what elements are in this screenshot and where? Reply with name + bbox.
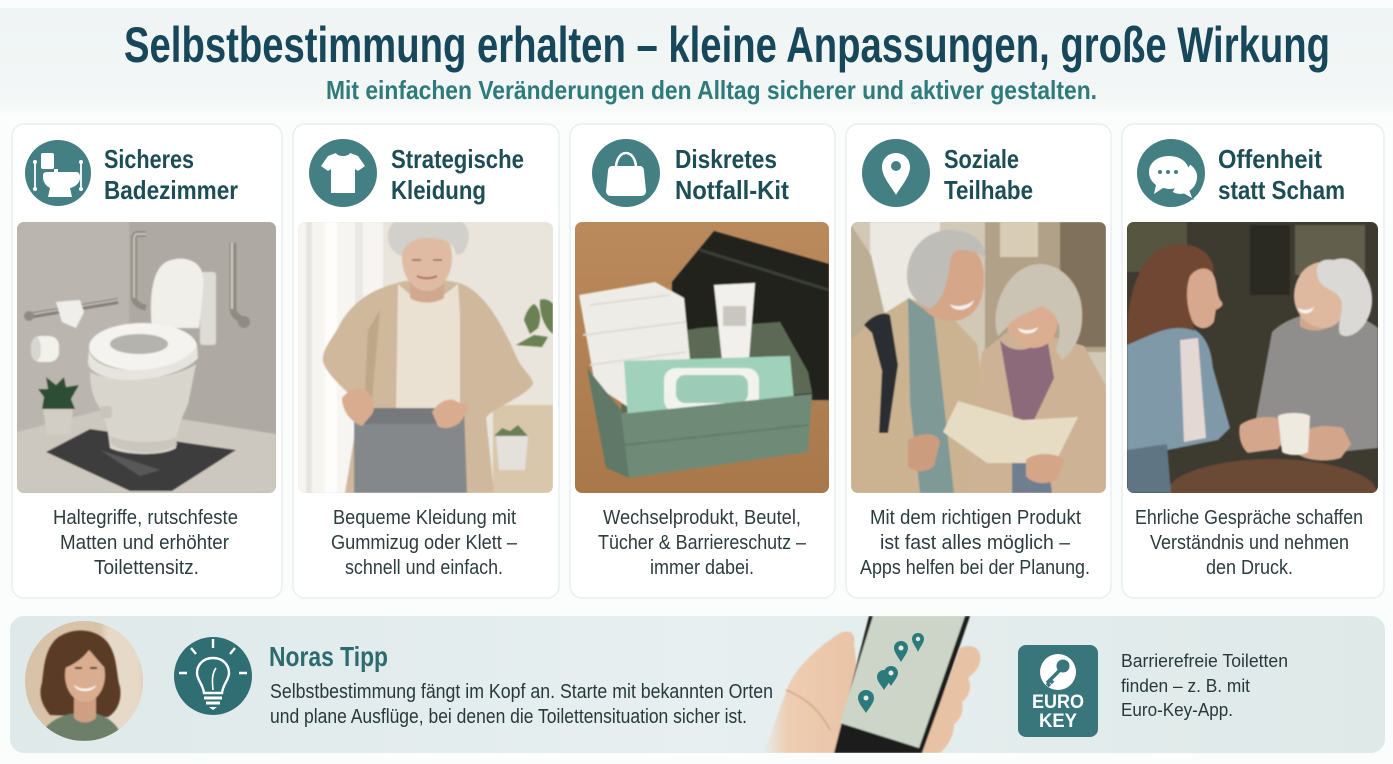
panel: tip banner xyxy=(10,616,1385,753)
illustration: hand with phone map xyxy=(762,616,980,753)
description: Verständnis und nehmen xyxy=(1150,532,1349,554)
description xyxy=(598,507,807,579)
description: ist fast alles möglich – xyxy=(880,532,1071,554)
badge: Euro Key xyxy=(1018,645,1098,737)
photo: accessible toilet xyxy=(17,222,276,493)
icon: bag xyxy=(592,139,660,207)
heading xyxy=(1218,144,1345,205)
heading: Sicheres xyxy=(104,144,194,174)
icon: toilet xyxy=(25,140,91,206)
badge: Euro Key: EURO xyxy=(1032,692,1084,713)
avatar: Nora xyxy=(25,621,143,741)
heading: Kleidung xyxy=(391,175,486,205)
description xyxy=(53,507,238,579)
panel: Diskretes Notfall-Kit xyxy=(570,124,835,598)
description: Tücher & Barriereschutz – xyxy=(598,532,807,554)
description xyxy=(1135,507,1363,579)
subtitle: Mit einfachen Veränderungen den Alltag sicherer und aktiver gestalten. xyxy=(326,75,1097,105)
icon: map pin xyxy=(862,139,930,207)
heading xyxy=(944,144,1033,205)
description: Gummizug oder Klett – xyxy=(331,532,518,554)
Euro Key text: Euro-Key-App. xyxy=(1121,700,1233,720)
description: Ehrliche Gespräche schaffen xyxy=(1135,507,1363,529)
Euro Key text xyxy=(1121,651,1288,720)
icon: t-shirt xyxy=(309,139,377,207)
heading: Soziale xyxy=(944,144,1019,174)
tip text: Selbstbestimmung fängt im Kopf an. Starte mit bekannten Orten xyxy=(270,681,773,703)
photo: two women at cafe xyxy=(1127,222,1378,493)
icon: speech bubbles xyxy=(1137,139,1205,207)
description: Haltegriffe, rutschfeste xyxy=(53,507,238,529)
tip text: und plane Ausflüge, bei denen die Toilettensituation sicher ist. xyxy=(270,706,747,728)
heading xyxy=(675,144,789,205)
panel: Strategische Kleidung xyxy=(293,124,559,598)
panel: Offenheit statt Scham xyxy=(1122,124,1384,598)
tip text xyxy=(270,681,773,728)
heading: Teilhabe xyxy=(944,175,1033,205)
description: Matten und erhöhter xyxy=(60,532,229,554)
Euro Key text: finden – z. B. mit xyxy=(1121,676,1250,696)
heading: Badezimmer xyxy=(104,175,238,205)
panel: Sicheres Badezimmer xyxy=(12,124,282,598)
heading xyxy=(391,144,524,205)
description: Toilettensitz. xyxy=(94,557,199,579)
badge: Euro Key: KEY xyxy=(1039,711,1077,732)
heading: Diskretes xyxy=(675,144,777,174)
heading: Strategische xyxy=(391,144,524,174)
description: immer dabei. xyxy=(650,557,754,579)
photo: woman with elastic waist trousers xyxy=(298,222,553,493)
heading: Notfall-Kit xyxy=(675,175,789,205)
description: Bequeme Kleidung mit xyxy=(333,507,516,529)
heading: statt Scham xyxy=(1218,175,1345,205)
icon: light bulb xyxy=(174,637,252,715)
header band xyxy=(0,8,1393,116)
map pins xyxy=(858,633,924,713)
description xyxy=(860,507,1090,579)
description: Mit dem richtigen Produkt xyxy=(870,507,1081,529)
tip heading: Noras Tipp xyxy=(269,641,388,672)
description: schnell und einfach. xyxy=(345,557,503,579)
photo: emergency kit xyxy=(575,222,829,493)
Euro Key text: Barrierefreie Toiletten xyxy=(1121,651,1288,671)
description: den Druck. xyxy=(1206,557,1293,579)
description xyxy=(331,507,518,579)
heading xyxy=(104,144,238,205)
description: Apps helfen bei der Planung. xyxy=(860,557,1090,579)
photo: couple with map xyxy=(851,222,1106,493)
heading: Offenheit xyxy=(1218,144,1322,174)
description: Wechselprodukt, Beutel, xyxy=(603,507,801,529)
panel: Soziale Teilhabe xyxy=(846,124,1111,598)
